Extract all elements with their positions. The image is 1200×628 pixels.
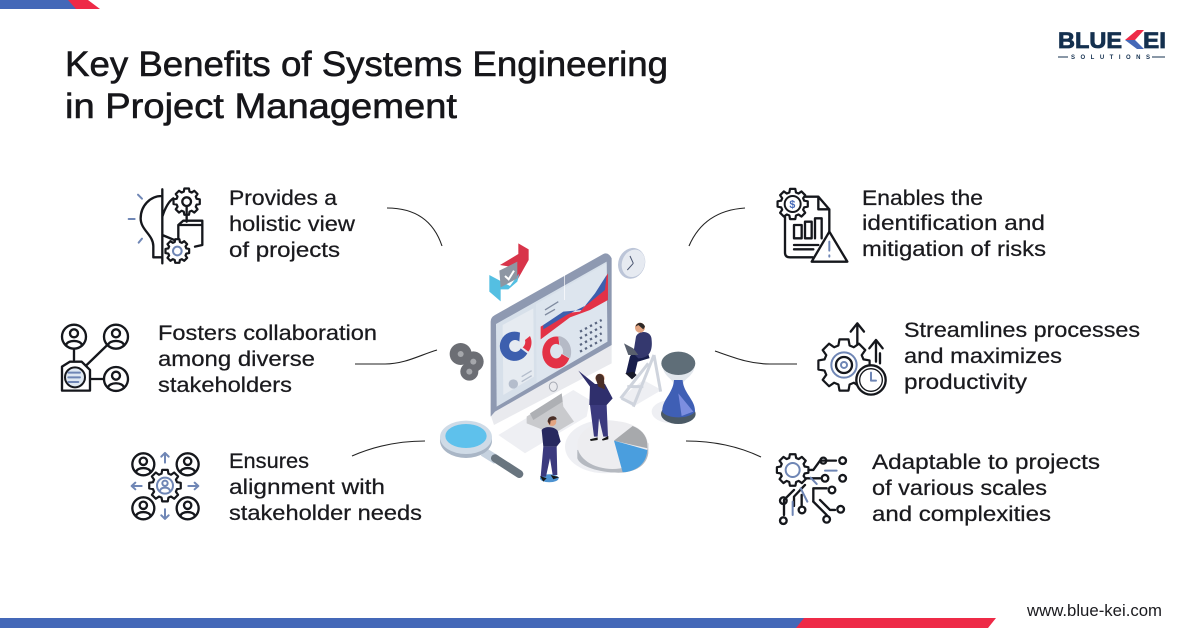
stepladder bbox=[621, 355, 661, 407]
standing woman pointing at screen bbox=[578, 371, 613, 441]
benefit text: collaboration bbox=[158, 322, 377, 397]
benefit text: adaptable: of various scales bbox=[872, 477, 1047, 500]
floor shadows bbox=[498, 380, 692, 473]
monitor chart: donut right bbox=[542, 336, 569, 368]
benefit text: risks: Enables the bbox=[862, 187, 983, 210]
benefit text: adaptable bbox=[872, 451, 1100, 526]
benefit text: productivity: Streamlines processes bbox=[904, 319, 1140, 342]
benefit text: adaptable: Adaptable to projects bbox=[872, 451, 1100, 474]
benefit text: risks: identification and bbox=[862, 212, 1045, 235]
benefit text: alignment: stakeholder needs bbox=[229, 502, 422, 525]
icon: lightbulb, gears and cube bbox=[129, 189, 202, 263]
icon: risk document bbox=[778, 189, 847, 262]
benefit text: productivity bbox=[904, 319, 1140, 394]
benefit text: alignment: Ensures bbox=[229, 450, 309, 473]
connector curves bbox=[352, 208, 797, 457]
title: in Project Management bbox=[65, 87, 457, 126]
central illustration bbox=[440, 243, 696, 482]
monitor bbox=[491, 253, 612, 425]
icon: risk document: $ bbox=[789, 199, 795, 211]
logo: Blue Kei Solutions bbox=[1058, 28, 1166, 61]
standing man with tablet bbox=[540, 416, 561, 482]
monitor dots grid bbox=[580, 320, 602, 352]
benefit text: collaboration: stakeholders bbox=[158, 374, 292, 397]
bottom accent bar bbox=[0, 618, 996, 628]
benefit text: risks bbox=[862, 187, 1046, 261]
benefit text: holistic view: holistic view bbox=[229, 213, 356, 236]
icon: hourglass bbox=[661, 352, 696, 424]
benefit text: holistic view bbox=[229, 187, 356, 262]
monitor chart: area graph bbox=[541, 273, 608, 339]
icon: magnifying glass bbox=[440, 421, 519, 474]
logo: Blue Kei Solutions: BLUE bbox=[1058, 28, 1122, 53]
icon: gear, clock and arrows bbox=[818, 323, 886, 395]
website url: www.blue-kei.com bbox=[1026, 602, 1162, 620]
benefit text: adaptable: and complexities bbox=[872, 503, 1051, 526]
top accent bar bbox=[0, 0, 100, 9]
monitor stand bbox=[527, 393, 574, 434]
benefit text: productivity: productivity bbox=[904, 371, 1028, 394]
title: Key Benefits of Systems Engineering bbox=[65, 45, 668, 84]
icon: pie chart bbox=[577, 421, 648, 473]
icon: cycle arrows with checkbox bbox=[489, 243, 529, 301]
icon: connected stakeholders bbox=[62, 325, 128, 391]
benefit text: risks: mitigation of risks bbox=[862, 238, 1046, 261]
benefit text: productivity: and maximizes bbox=[904, 345, 1062, 368]
icon: stakeholder alignment bbox=[132, 453, 199, 519]
person on ladder with laptop bbox=[624, 323, 652, 379]
benefit text: collaboration: Fosters collaboration bbox=[158, 322, 377, 345]
logo: Blue Kei Solutions: EI bbox=[1143, 28, 1166, 53]
monitor chart: donut left bbox=[500, 332, 527, 361]
icon: circuit gear bbox=[777, 454, 846, 524]
benefit text: holistic view: of projects bbox=[229, 239, 340, 262]
benefit text: holistic view: Provides a bbox=[229, 187, 337, 210]
icon: wall clock bbox=[614, 244, 650, 283]
title bbox=[65, 45, 668, 126]
benefit text: alignment: alignment with bbox=[229, 476, 385, 499]
icon: gears bbox=[450, 343, 484, 381]
logo: Blue Kei Solutions: SOLUTIONS bbox=[1071, 55, 1150, 61]
benefit text: alignment bbox=[229, 450, 422, 525]
benefit text: collaboration: among diverse bbox=[158, 348, 315, 371]
